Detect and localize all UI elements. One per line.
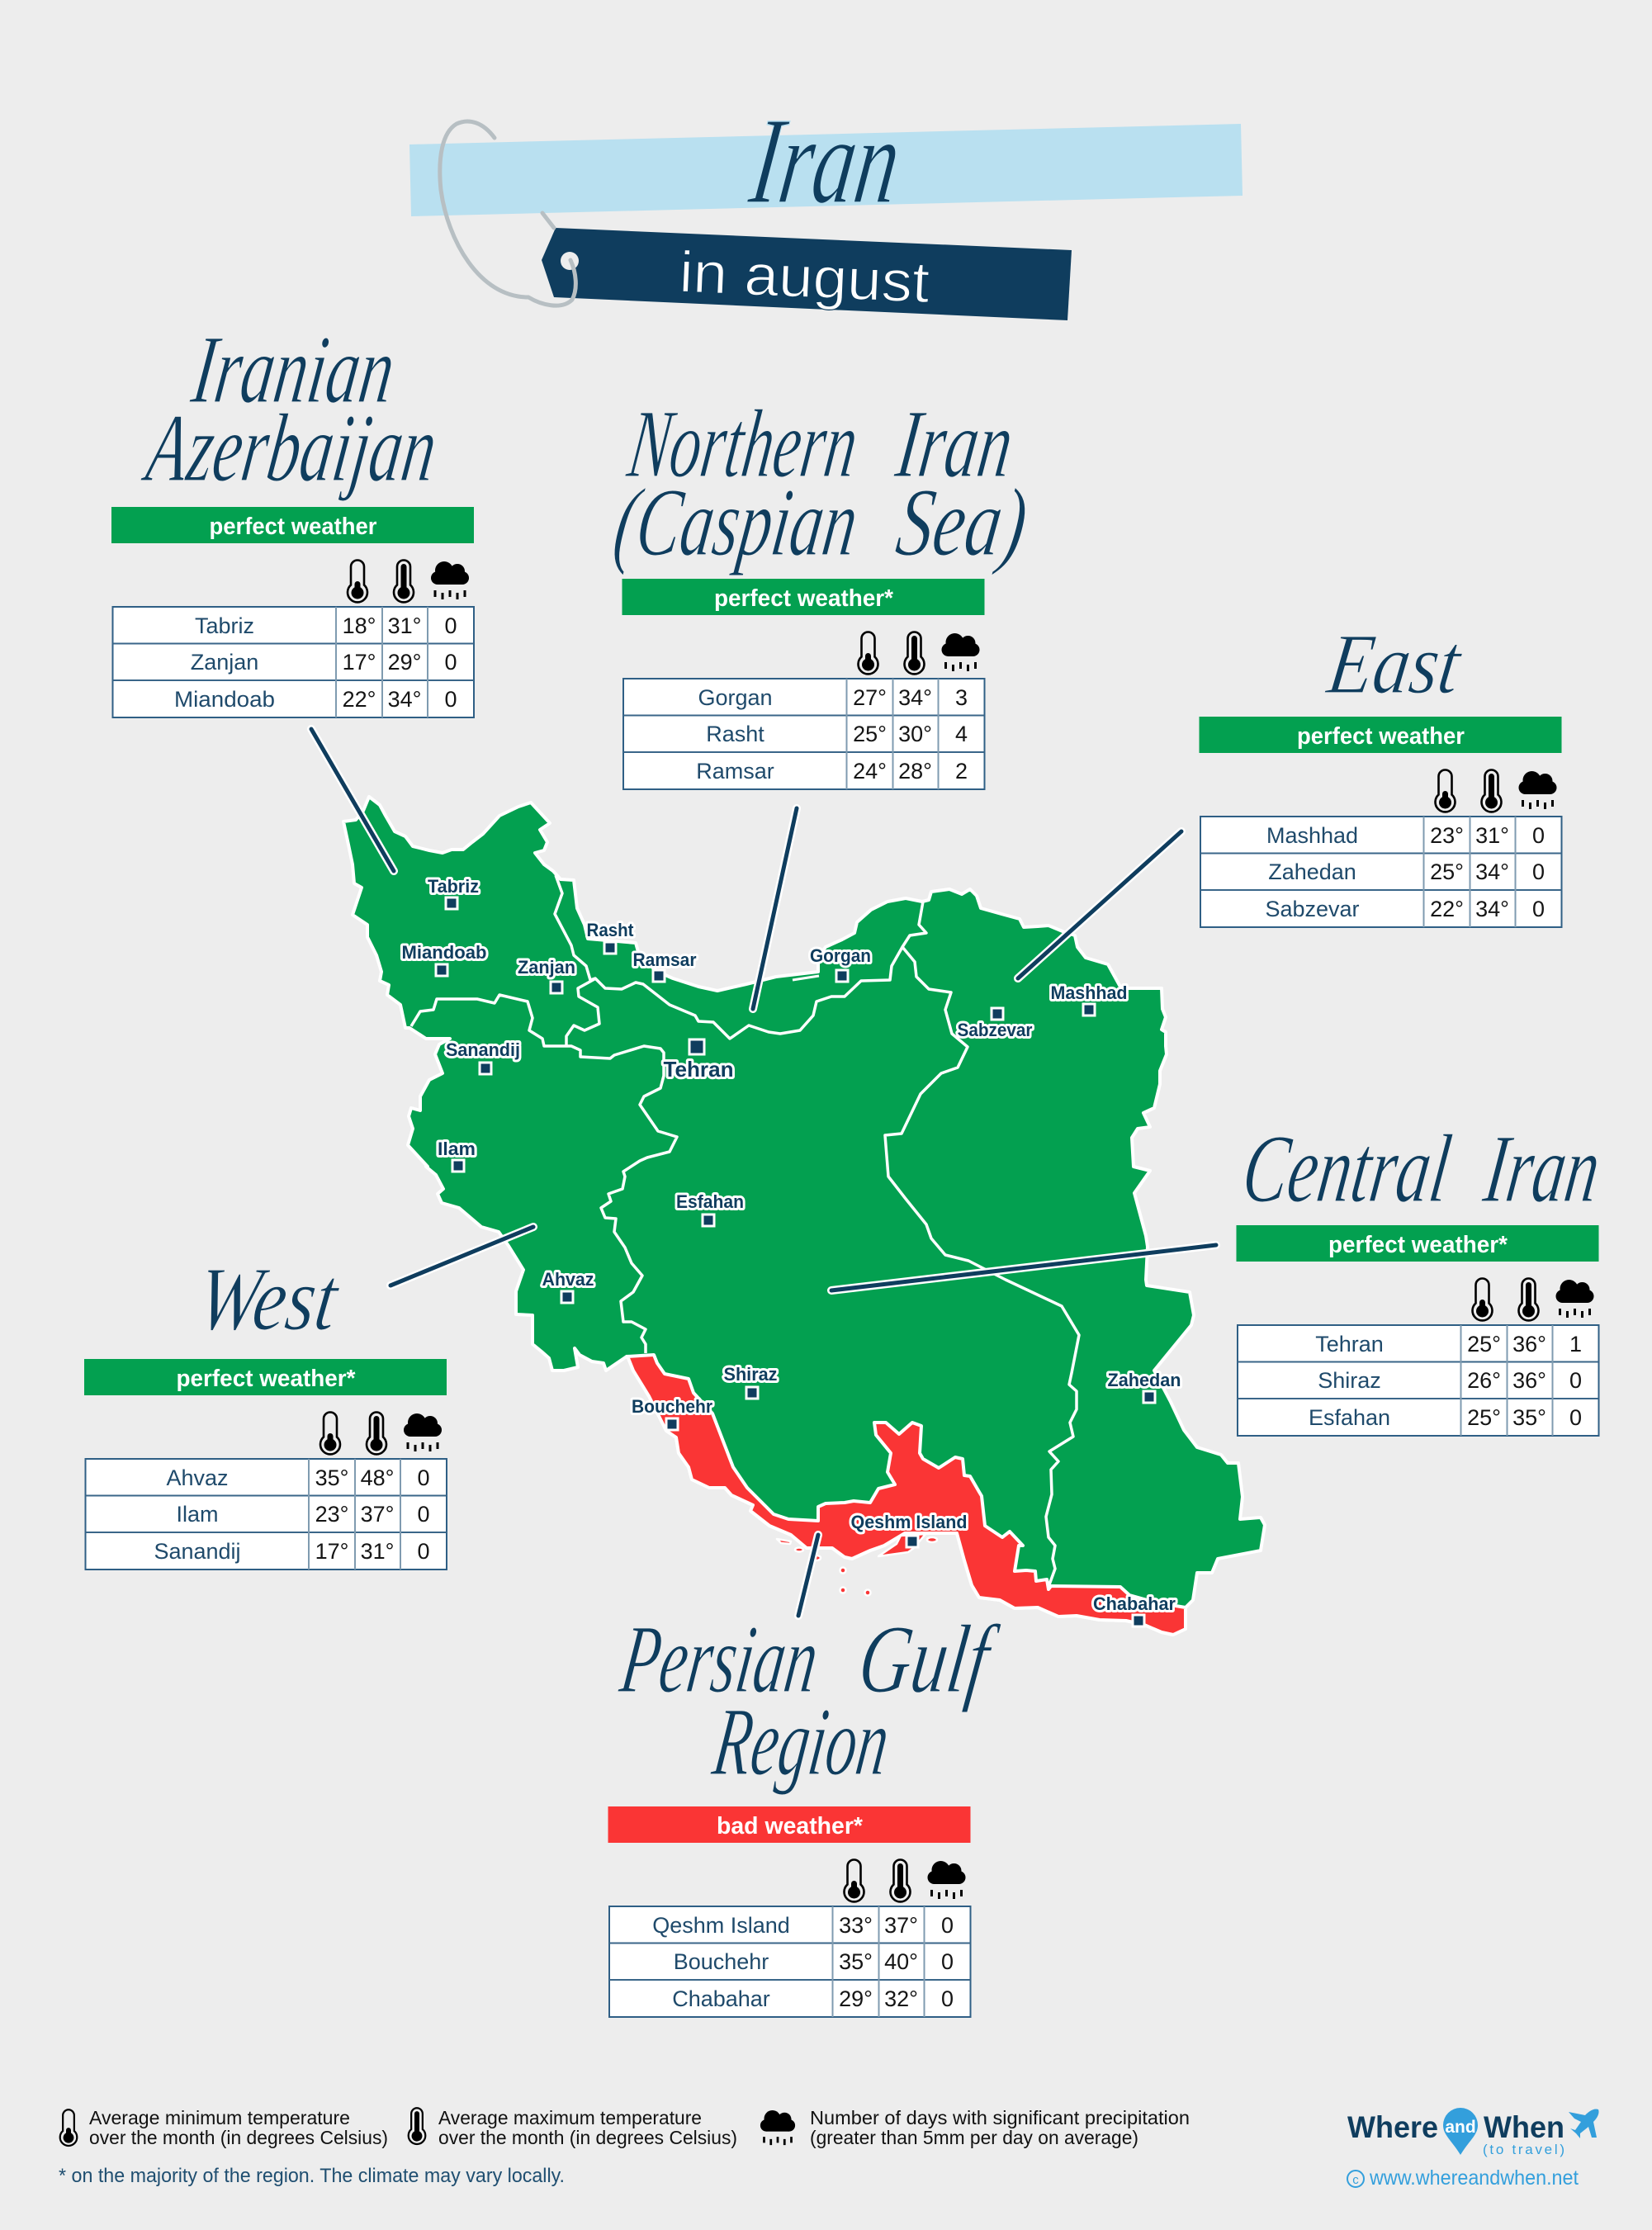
- city labels: Esfahan: [676, 1191, 744, 1212]
- weather table: Central Iran: 25°: [1467, 1332, 1501, 1356]
- weather table: Iranian Azerbaijan: 34°: [388, 687, 421, 712]
- city labels: Chabahar: [1093, 1593, 1176, 1614]
- city labels: Ilam: [438, 1139, 476, 1159]
- map: green regions: [343, 797, 1265, 1635]
- callout lines: [311, 729, 1216, 1616]
- city labels: Tabriz: [428, 876, 479, 897]
- weather table: Persian Gulf Region: 0: [941, 1913, 954, 1938]
- city labels: Rasht: [586, 920, 634, 940]
- heading: Persian Gulf Region: Gulf: [853, 1605, 1005, 1713]
- panel: Northern Iran: [608, 390, 1034, 789]
- heading: Central Iran: Central: [1237, 1115, 1457, 1223]
- city labels: Shiraz: [723, 1364, 778, 1385]
- weather table: Northern Iran: 25°: [853, 722, 887, 746]
- city labels: [401, 876, 1181, 1614]
- weather table: West: [84, 1359, 447, 1570]
- legend: precipitation: [760, 2107, 1190, 2148]
- weather table: Northern Iran: [622, 579, 984, 789]
- logo: Where and When: (to travel): [1483, 2142, 1564, 2157]
- city labels: Tehran: [664, 1057, 733, 1082]
- weather table: West: 0: [417, 1539, 430, 1564]
- weather table: Northern Iran: 27°: [853, 685, 887, 710]
- city labels: Zahedan: [1108, 1370, 1181, 1390]
- weather table: Persian Gulf Region: 40°: [884, 1949, 918, 1974]
- weather table: Central Iran: 1: [1569, 1332, 1582, 1356]
- light blue ribbon: [409, 124, 1243, 216]
- heading: Northern Iran (Caspian Sea): Northern: [622, 390, 864, 498]
- weather table: Iranian Azerbaijan: 18°: [343, 613, 376, 638]
- panel: West: [84, 1248, 447, 1570]
- weather table: Persian Gulf Region: Qeshm Island: [652, 1913, 790, 1938]
- weather table: East: Sabzevar: [1265, 897, 1360, 921]
- weather table: Northern Iran: perfect weather*: [714, 585, 894, 612]
- weather table: Iranian Azerbaijan: Tabriz: [195, 613, 254, 638]
- city labels: Sanandij: [446, 1039, 520, 1060]
- icon: map pin: and: [1445, 2118, 1476, 2137]
- weather table: Persian Gulf Region: Chabahar: [672, 1986, 770, 2011]
- legend: minimum temperature: [60, 2107, 388, 2148]
- weather table: Persian Gulf Region: bad weather*: [717, 1813, 864, 1839]
- heading: Northern Iran (Caspian Sea): [608, 390, 1034, 576]
- weather table: East: 25°: [1430, 859, 1464, 884]
- weather table: Persian Gulf Region: 29°: [839, 1986, 873, 2011]
- weather table: West: 0: [417, 1465, 430, 1490]
- weather table: East: Mashhad: [1266, 823, 1358, 848]
- weather table: East: 34°: [1475, 859, 1509, 884]
- weather table: West: 37°: [361, 1502, 394, 1527]
- weather table: West: 23°: [315, 1502, 348, 1527]
- weather table: Northern Iran: 3: [955, 685, 968, 710]
- city labels: Qeshm Island: [850, 1512, 968, 1532]
- weather table: Northern Iran: Ramsar: [696, 759, 774, 784]
- weather table: East: perfect weather: [1297, 723, 1465, 750]
- weather table: Persian Gulf Region: 33°: [839, 1913, 873, 1938]
- weather table: Iranian Azerbaijan: 0: [444, 650, 457, 675]
- title: Iran: Iran: [743, 92, 909, 230]
- heading: West: West: [192, 1248, 345, 1349]
- weather table: Iranian Azerbaijan: 0: [444, 613, 457, 638]
- weather table: Iranian Azerbaijan: 0: [444, 687, 457, 712]
- weather table: Central Iran: 26°: [1467, 1368, 1501, 1393]
- legend: [59, 2107, 1190, 2187]
- weather table: West: 31°: [361, 1539, 394, 1564]
- weather table: Persian Gulf Region: 32°: [884, 1986, 918, 2011]
- weather table: Central Iran: 36°: [1512, 1368, 1546, 1393]
- heading: Northern Iran (Caspian Sea): (Caspian: [608, 468, 864, 576]
- city labels: Ahvaz: [542, 1269, 594, 1290]
- panel: Central Iran: [1237, 1115, 1607, 1436]
- logo: Where and When: [1347, 2108, 1599, 2190]
- weather table: Central Iran: [1237, 1225, 1598, 1436]
- legend: maximum temperature: over the month (in degrees Celsius): [438, 2127, 737, 2148]
- heading: Persian Gulf Region: Persian: [614, 1605, 825, 1713]
- weather table: East: Zahedan: [1268, 859, 1356, 884]
- weather table: Central Iran: 36°: [1512, 1332, 1546, 1356]
- legend: minimum temperature: Average minimum temperature: [89, 2107, 350, 2128]
- weather table: Iranian Azerbaijan: 17°: [343, 650, 376, 675]
- website: c: [1352, 2173, 1359, 2187]
- icon: map pin: [1443, 2108, 1478, 2155]
- weather table: Northern Iran: 24°: [853, 759, 887, 784]
- panel: Iranian Azerbaijan: [111, 315, 474, 717]
- weather table: East: 0: [1532, 897, 1545, 921]
- weather table: Central Iran: Tehran: [1315, 1332, 1384, 1356]
- heading: Iranian Azerbaijan: [137, 315, 443, 502]
- heading: Persian Gulf Region: [614, 1605, 1005, 1796]
- weather table: Iranian Azerbaijan: 29°: [388, 650, 421, 675]
- city labels: Mashhad: [1050, 982, 1128, 1003]
- weather table: East: 23°: [1430, 823, 1464, 848]
- weather table: Central Iran: 35°: [1512, 1405, 1546, 1430]
- weather table: Persian Gulf Region: 37°: [884, 1913, 918, 1938]
- weather table: Central Iran: Esfahan: [1309, 1405, 1390, 1430]
- city labels: Bouchehr: [632, 1396, 712, 1417]
- weather table: East: 31°: [1475, 823, 1509, 848]
- weather table: Persian Gulf Region: Bouchehr: [674, 1949, 769, 1974]
- panel: East: [1199, 616, 1562, 927]
- title banner: [409, 92, 1243, 320]
- city labels: Zanjan: [518, 957, 575, 978]
- heading: Persian Gulf Region: Region: [707, 1688, 896, 1796]
- city labels: Ramsar: [632, 949, 697, 970]
- weather table: Iranian Azerbaijan: Zanjan: [191, 650, 258, 675]
- map: red Persian Gulf region: [627, 1355, 1186, 1635]
- weather table: Central Iran: 0: [1569, 1368, 1582, 1393]
- heading: Northern Iran (Caspian Sea): Iran: [890, 390, 1020, 498]
- weather table: Northern Iran: 34°: [898, 685, 932, 710]
- legend: minimum temperature: over the month (in degrees Celsius): [89, 2127, 388, 2148]
- weather table: Northern Iran: Rasht: [706, 722, 764, 746]
- legend: precipitation: Number of days with significant precipitation: [810, 2107, 1190, 2128]
- city labels: Miandoab: [401, 942, 487, 963]
- weather table: West: 17°: [315, 1539, 348, 1564]
- weather table: East: 0: [1532, 859, 1545, 884]
- city markers: [436, 897, 1155, 1626]
- weather table: East: 34°: [1475, 897, 1509, 921]
- weather table: Northern Iran: 2: [955, 759, 968, 784]
- weather table: Iranian Azerbaijan: 31°: [388, 613, 421, 638]
- weather table: Iranian Azerbaijan: 22°: [343, 687, 376, 712]
- weather table: West: Ahvaz: [166, 1465, 229, 1490]
- weather table: West: Ilam: [176, 1502, 219, 1527]
- weather table: Central Iran: perfect weather*: [1328, 1232, 1508, 1258]
- legend: maximum temperature: Average maximum temperature: [438, 2107, 702, 2128]
- weather table: Persian Gulf Region: 0: [941, 1986, 954, 2011]
- weather table: East: 22°: [1430, 897, 1464, 921]
- weather table: East: [1199, 717, 1562, 927]
- weather table: Central Iran: 25°: [1467, 1405, 1501, 1430]
- tag: in august: in august: [678, 239, 930, 315]
- legend: maximum temperature: [409, 2107, 737, 2148]
- weather table: Iranian Azerbaijan: Miandoab: [174, 687, 275, 712]
- weather table: West: 0: [417, 1502, 430, 1527]
- weather table: Persian Gulf Region: 35°: [839, 1949, 873, 1974]
- weather table: Iranian Azerbaijan: [111, 507, 474, 717]
- map: islands: [777, 1534, 937, 1595]
- weather table: Northern Iran: Gorgan: [698, 685, 773, 710]
- weather table: West: perfect weather*: [177, 1366, 356, 1392]
- heading: Iranian Azerbaijan: Azerbaijan: [137, 394, 443, 502]
- panel: Persian Gulf Region: [608, 1605, 1005, 2017]
- weather table: East: 0: [1532, 823, 1545, 848]
- weather table: Central Iran: 0: [1569, 1405, 1582, 1430]
- weather table: West: 35°: [315, 1465, 348, 1490]
- logo: Where and When: When: [1484, 2110, 1564, 2144]
- heading: Northern Iran (Caspian Sea): Sea): [891, 468, 1034, 576]
- weather table: Northern Iran: 28°: [898, 759, 932, 784]
- weather table: Northern Iran: 4: [955, 722, 968, 746]
- footnote: * on the majority of the region. The climate may vary locally.: [59, 2165, 565, 2187]
- heading: Iranian Azerbaijan: Iranian: [186, 315, 401, 424]
- city labels: Gorgan: [810, 945, 871, 966]
- tag: in august: [542, 228, 1072, 320]
- city labels: Sabzevar: [958, 1020, 1033, 1040]
- map of Iran: [343, 797, 1265, 1635]
- tag string: [440, 121, 575, 305]
- weather table: Persian Gulf Region: 0: [941, 1949, 954, 1974]
- website: www.whereandwhen.net: [1369, 2166, 1579, 2190]
- icon: airplane: [1569, 2109, 1599, 2138]
- heading: East: East: [1321, 616, 1469, 712]
- weather table: Northern Iran: 30°: [898, 722, 932, 746]
- weather table: West: 48°: [361, 1465, 394, 1490]
- weather table: Iranian Azerbaijan: perfect weather: [210, 514, 376, 540]
- weather table: West: Sanandij: [154, 1539, 241, 1564]
- weather table: Central Iran: Shiraz: [1318, 1368, 1381, 1393]
- legend: precipitation: (greater than 5mm per day on average): [810, 2127, 1138, 2148]
- weather table: Persian Gulf Region: [608, 1806, 971, 2017]
- logo: Where and When: Where: [1347, 2110, 1438, 2144]
